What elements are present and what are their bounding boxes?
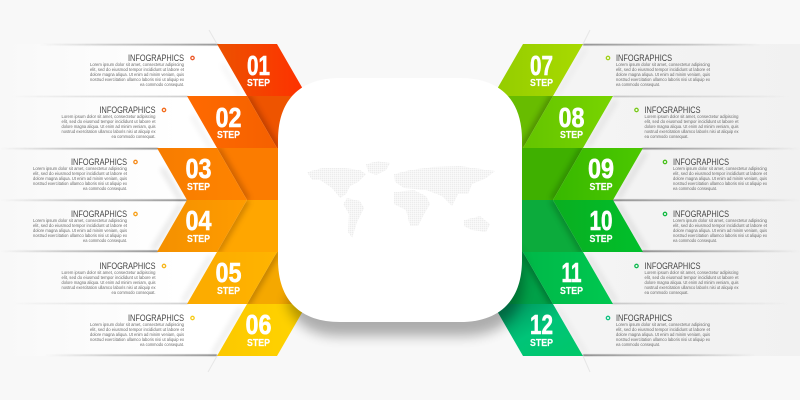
step 03: Lorem ipsum dolor sit amet, consectetur adipiscing — [33, 166, 128, 171]
step 10: INFOGRAPHICS — [673, 209, 729, 219]
step 09: Lorem ipsum dolor sit amet, consectetur adipiscing — [673, 166, 768, 171]
step 09: elit, sed do eiusmod tempor incididunt ut labore et — [673, 171, 768, 176]
step 12: 12 — [530, 309, 553, 340]
step 03: dolore magna aliqua. Ut enim ad minim veniam, quis — [33, 176, 127, 181]
step 12: Lorem ipsum dolor sit amet, consectetur adipiscing — [616, 322, 711, 327]
step 11: nostrud exercitation ullamco laboris nisi ut aliquip ex — [644, 285, 739, 290]
step 04: ea commodo consequat. — [83, 238, 127, 243]
step 06: dolore magna aliqua. Ut enim ad minim veniam, quis — [90, 332, 184, 337]
step 01: elit, sed do eiusmod tempor incididunt ut labore et — [90, 67, 185, 72]
step 08: Lorem ipsum dolor sit amet, consectetur adipiscing — [644, 114, 739, 119]
step 07 — [493, 44, 711, 96]
step 10: nostrud exercitation ullamco laboris nisi ut aliquip ex — [673, 233, 768, 238]
step 01: 01 — [247, 50, 270, 81]
step 02: ea commodo consequat. — [112, 134, 156, 139]
step 07: elit, sed do eiusmod tempor incididunt ut labore et — [616, 67, 711, 72]
step 03: STEP — [187, 182, 210, 193]
step 04: nostrud exercitation ullamco laboris nisi ut aliquip ex — [33, 233, 128, 238]
step 08: STEP — [560, 130, 583, 141]
step 11: ea commodo consequat. — [644, 290, 688, 295]
step 03: INFOGRAPHICS — [71, 157, 127, 167]
step 05 — [62, 252, 310, 304]
step 08 — [490, 96, 739, 148]
step 09: 09 — [588, 153, 614, 184]
step 12 — [493, 304, 711, 356]
step 06: INFOGRAPHICS — [128, 313, 184, 323]
step 08: 08 — [558, 102, 584, 133]
step 11: STEP — [560, 286, 583, 297]
step 11: Lorem ipsum dolor sit amet, consectetur adipiscing — [644, 270, 739, 275]
step 06 — [90, 304, 307, 356]
step 10: ea commodo consequat. — [673, 238, 717, 243]
step 03: 03 — [186, 153, 212, 184]
center white rounded panel — [278, 78, 522, 322]
step 09: INFOGRAPHICS — [673, 157, 729, 167]
step 06: ea commodo consequat. — [140, 342, 184, 347]
center panel shadow — [286, 240, 524, 336]
step 07: nostrud exercitation ullamco laboris nisi ut aliquip ex — [616, 77, 711, 82]
step 05: dolore magna aliqua. Ut enim ad minim veniam, quis — [62, 280, 156, 285]
step 06: 06 — [246, 309, 272, 340]
step 10: 10 — [590, 205, 612, 236]
step 02: nostrud exercitation ullamco laboris nisi ut aliquip ex — [62, 129, 156, 134]
step 02: INFOGRAPHICS — [100, 105, 156, 115]
step 09: nostrud exercitation ullamco laboris nisi ut aliquip ex — [673, 181, 768, 186]
step 01: Lorem ipsum dolor sit amet, consectetur adipiscing — [90, 62, 185, 67]
step 02: STEP — [217, 130, 240, 141]
step 12: STEP — [530, 338, 553, 349]
step 06: elit, sed do eiusmod tempor incididunt ut labore et — [90, 327, 185, 332]
step 07: dolore magna aliqua. Ut enim ad minim veniam, quis — [616, 72, 710, 77]
step 10 — [522, 200, 767, 252]
step 01: INFOGRAPHICS — [128, 53, 184, 63]
step 06: nostrud exercitation ullamco laboris nisi ut aliquip ex — [90, 337, 185, 342]
step 12: elit, sed do eiusmod tempor incididunt ut labore et — [616, 327, 711, 332]
step 11: elit, sed do eiusmod tempor incididunt ut labore et — [644, 275, 739, 280]
step 08: dolore magna aliqua. Ut enim ad minim veniam, quis — [644, 124, 738, 129]
step 11 — [490, 252, 739, 304]
step 08: nostrud exercitation ullamco laboris nisi ut aliquip ex — [644, 129, 739, 134]
step 05: Lorem ipsum dolor sit amet, consectetur adipiscing — [62, 270, 156, 275]
step 04: 04 — [186, 205, 212, 236]
step 12: nostrud exercitation ullamco laboris nisi ut aliquip ex — [616, 337, 711, 342]
left row strips — [0, 30, 300, 372]
step 05: STEP — [217, 286, 240, 297]
step 09: dolore magna aliqua. Ut enim ad minim veniam, quis — [673, 176, 767, 181]
step 05: nostrud exercitation ullamco laboris nisi ut aliquip ex — [62, 285, 156, 290]
step 11: 11 — [562, 257, 582, 288]
step 04: STEP — [187, 234, 210, 245]
step 10: dolore magna aliqua. Ut enim ad minim veniam, quis — [673, 228, 767, 233]
step 01: ea commodo consequat. — [140, 82, 184, 87]
step 08: elit, sed do eiusmod tempor incididunt ut labore et — [644, 119, 739, 124]
step 02: elit, sed do eiusmod tempor incididunt ut labore et — [62, 119, 156, 124]
step 07: INFOGRAPHICS — [616, 53, 672, 63]
step 03: nostrud exercitation ullamco laboris nisi ut aliquip ex — [33, 181, 128, 186]
step 04: Lorem ipsum dolor sit amet, consectetur adipiscing — [33, 218, 128, 223]
step 10: STEP — [590, 234, 613, 245]
step 12: dolore magna aliqua. Ut enim ad minim veniam, quis — [616, 332, 710, 337]
world map — [307, 161, 495, 238]
step 01: dolore magna aliqua. Ut enim ad minim veniam, quis — [90, 72, 184, 77]
step 12: ea commodo consequat. — [616, 342, 660, 347]
step 11: dolore magna aliqua. Ut enim ad minim veniam, quis — [644, 280, 738, 285]
right row strips — [500, 30, 800, 372]
step 02: 02 — [216, 102, 242, 133]
step 02: Lorem ipsum dolor sit amet, consectetur adipiscing — [62, 114, 156, 119]
step 06: STEP — [247, 338, 270, 349]
step 05: elit, sed do eiusmod tempor incididunt ut labore et — [62, 275, 156, 280]
step 06: Lorem ipsum dolor sit amet, consectetur adipiscing — [90, 322, 185, 327]
step 07: Lorem ipsum dolor sit amet, consectetur adipiscing — [616, 62, 711, 67]
step 10: elit, sed do eiusmod tempor incididunt ut labore et — [673, 223, 768, 228]
step 09: ea commodo consequat. — [673, 186, 717, 191]
step 04: INFOGRAPHICS — [71, 209, 127, 219]
step 11: INFOGRAPHICS — [644, 261, 700, 271]
step 07: ea commodo consequat. — [616, 82, 660, 87]
step 09: STEP — [590, 182, 613, 193]
step 01 — [90, 44, 307, 96]
step 10: Lorem ipsum dolor sit amet, consectetur adipiscing — [673, 218, 768, 223]
step 05: 05 — [216, 257, 242, 288]
step 09 — [522, 148, 767, 200]
step 03 — [33, 148, 278, 200]
step 04: elit, sed do eiusmod tempor incididunt ut labore et — [33, 223, 128, 228]
step 12: INFOGRAPHICS — [616, 313, 672, 323]
step 08: INFOGRAPHICS — [644, 105, 700, 115]
step 05: ea commodo consequat. — [112, 290, 156, 295]
step 07: STEP — [530, 78, 553, 89]
step 04: dolore magna aliqua. Ut enim ad minim veniam, quis — [33, 228, 127, 233]
step 04 — [33, 200, 278, 252]
step 02: dolore magna aliqua. Ut enim ad minim veniam, quis — [62, 124, 156, 129]
step 01: STEP — [247, 78, 270, 89]
step 03: ea commodo consequat. — [83, 186, 127, 191]
step 01: nostrud exercitation ullamco laboris nisi ut aliquip ex — [90, 77, 185, 82]
step 08: ea commodo consequat. — [644, 134, 688, 139]
step 05: INFOGRAPHICS — [100, 261, 156, 271]
step 07: 07 — [530, 50, 553, 81]
step 03: elit, sed do eiusmod tempor incididunt ut labore et — [33, 171, 128, 176]
step 02 — [62, 96, 310, 148]
